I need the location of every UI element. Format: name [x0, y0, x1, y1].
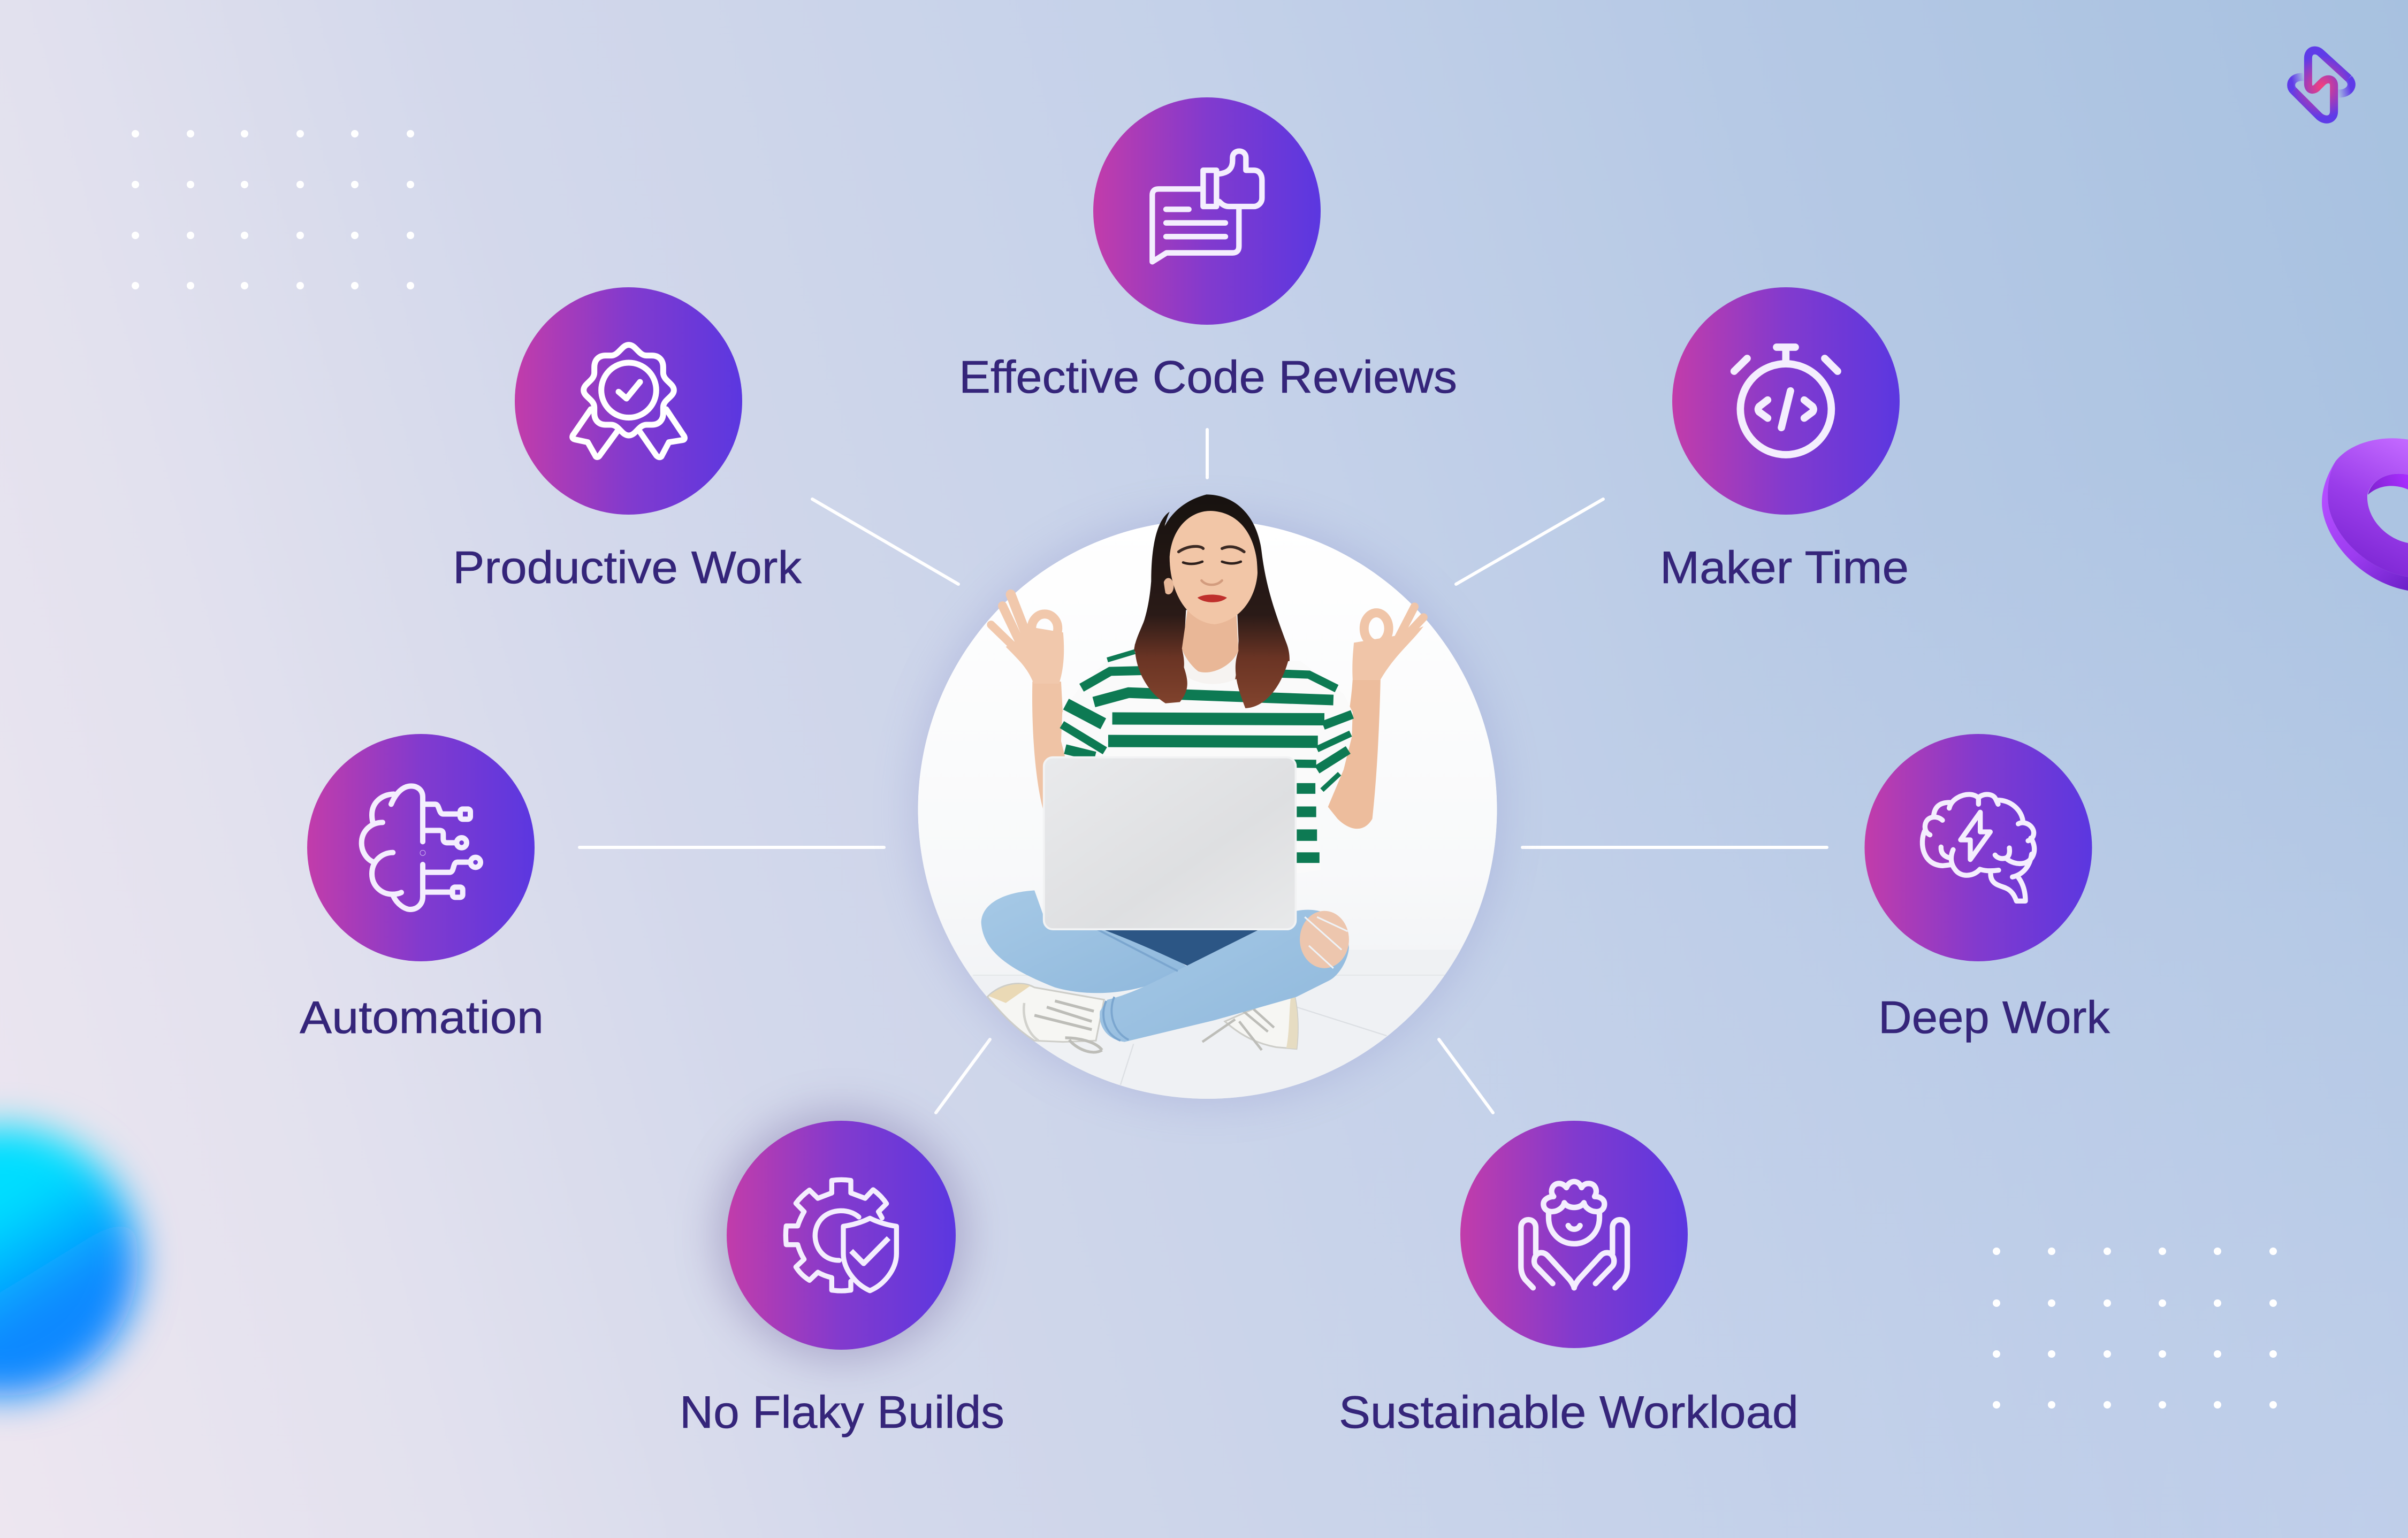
- label: No Flaky Builds: [680, 1387, 1004, 1438]
- right arm: [1324, 679, 1381, 829]
- node: No Flaky Builds: [680, 1111, 1004, 1438]
- connector lines: [580, 430, 1827, 1113]
- jeans inner dark: [1079, 921, 1268, 967]
- icon: gear with shield: [786, 1180, 896, 1291]
- icon: award rosette: [573, 345, 684, 457]
- icon: person cradled by hands: [1521, 1182, 1627, 1288]
- decorative purple 3D ring: [2322, 438, 2408, 591]
- ears: [1163, 578, 1173, 594]
- icon: stopwatch with code: [1734, 347, 1838, 455]
- central photo: woman meditating with laptop: [913, 494, 1502, 1106]
- node: Effective Code Reviews: [959, 97, 1457, 403]
- icon circle shadow: [717, 1111, 965, 1359]
- face: [1170, 511, 1258, 624]
- jeans seams and hem: [1088, 924, 1178, 1040]
- label: Maker Time: [1660, 542, 1909, 593]
- shirt stripes: [1062, 652, 1352, 858]
- icon circle: [307, 734, 535, 961]
- shirt: [1061, 651, 1353, 874]
- left hand: [991, 594, 1064, 684]
- node: Automation: [300, 734, 544, 1043]
- icon circle: [1864, 734, 2092, 961]
- eyebrows and eyes: [1179, 546, 1244, 552]
- icon circle: [1093, 97, 1321, 325]
- laptop: [1044, 757, 1296, 929]
- decorative blurred blue blob: [0, 1127, 138, 1396]
- icon: speech bubble with thumbs up: [1152, 151, 1262, 262]
- label: Deep Work: [1878, 992, 2110, 1043]
- photo circle shadow: [913, 515, 1502, 1104]
- dot grid: top left: [132, 130, 414, 289]
- left arm: [1032, 682, 1065, 815]
- icon circle: [1672, 287, 1900, 515]
- icon circle: [515, 287, 742, 515]
- lips: [1198, 595, 1227, 602]
- label: Sustainable Workload: [1339, 1387, 1799, 1438]
- dot grid: bottom right: [1993, 1248, 2277, 1409]
- left leg: [981, 890, 1190, 993]
- label: Effective Code Reviews: [959, 352, 1457, 403]
- right shoe: [1202, 989, 1298, 1050]
- node: Productive Work: [453, 287, 802, 593]
- hair back: [1134, 494, 1290, 708]
- left shoe: [987, 984, 1104, 1052]
- node: Sustainable Workload: [1339, 1121, 1799, 1438]
- logo: [2291, 50, 2351, 119]
- nose: [1201, 580, 1222, 585]
- photo circle backdrop: [916, 520, 1502, 1106]
- node: Deep Work: [1864, 734, 2110, 1043]
- icon: brain with lightning: [1922, 794, 2034, 901]
- right hand: [1352, 607, 1423, 679]
- torn knee: [1300, 911, 1349, 968]
- label: Productive Work: [453, 542, 802, 593]
- right leg: [1100, 910, 1349, 1042]
- icon circle: [727, 1121, 956, 1350]
- icon circle: [1460, 1121, 1688, 1348]
- icon: half brain circuit: [362, 786, 481, 909]
- node: Maker Time: [1660, 287, 1909, 593]
- label: Automation: [300, 992, 544, 1043]
- hair front locks: [1135, 512, 1187, 703]
- neck and collar: [1175, 610, 1239, 684]
